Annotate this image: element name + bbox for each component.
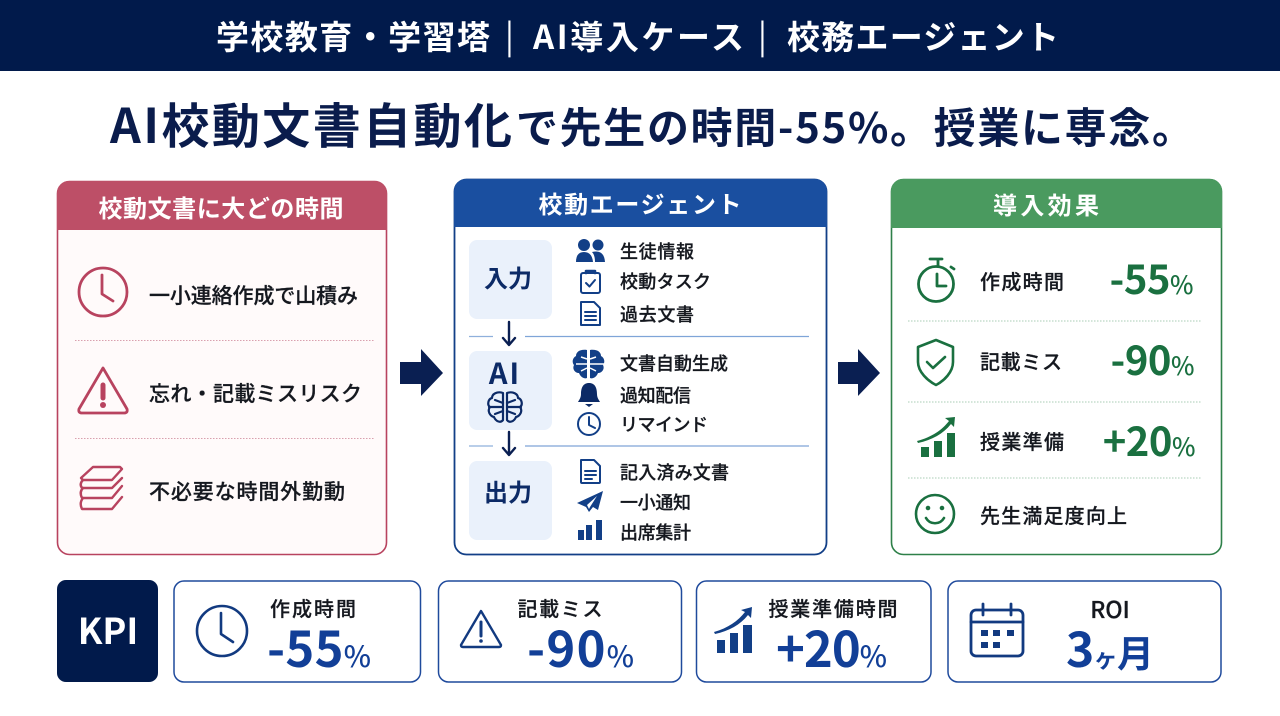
kpi card: errors bbox=[438, 581, 682, 682]
icon: people bbox=[576, 239, 605, 262]
panel: agent bbox=[454, 179, 827, 554]
icon: bell bbox=[578, 383, 600, 407]
panel: problems bbox=[57, 181, 387, 554]
output box: 出力 bbox=[484, 480, 532, 507]
output box bbox=[469, 461, 552, 540]
item: auto generation: 文書自動生成 bbox=[620, 354, 728, 374]
kpi card: time bbox=[174, 581, 420, 682]
item: past documents: 過去文書 bbox=[620, 305, 694, 325]
item: student info: 生徒情報 bbox=[620, 242, 694, 262]
arrow: ai to output bbox=[503, 432, 515, 455]
header text: AI導入ケース bbox=[532, 11, 744, 59]
result: lesson prep label: 授業準備 bbox=[980, 431, 1064, 454]
panel header: agent: 校動エージェント bbox=[538, 192, 742, 219]
ai box bbox=[469, 351, 552, 430]
icon: clipboard check bbox=[581, 271, 600, 293]
icon: paper stack bbox=[81, 467, 122, 509]
result: satisfaction: 先生満足度向上 bbox=[980, 505, 1127, 528]
kpi card: roi: ROI bbox=[1090, 591, 1130, 625]
item: completed document: 記入済み文書 bbox=[620, 463, 729, 483]
header text: 学校教育・学習塔 bbox=[216, 11, 490, 59]
result: time value: -55% bbox=[1110, 248, 1193, 306]
icon: kpi warning bbox=[461, 611, 501, 647]
title: AI校動文書自動化 bbox=[109, 87, 512, 157]
icon: kpi growth chart bbox=[714, 607, 752, 653]
title: で先生の時間-55%。授業に専念。 bbox=[516, 95, 1194, 156]
input box bbox=[469, 240, 552, 319]
panel header: results bbox=[891, 179, 1222, 228]
problem text 1: 一小連絡作成で山積み bbox=[149, 285, 358, 308]
item: attendance: 出席集計 bbox=[620, 523, 691, 543]
kpi card: errors: 記載ミス bbox=[518, 598, 602, 621]
arrow: agent to results bbox=[838, 349, 880, 396]
result: errors value: -90% bbox=[1111, 329, 1194, 387]
item: notice: 一小通知 bbox=[620, 493, 691, 513]
icon: brain outline bbox=[488, 392, 522, 422]
item: reminder: リマインド bbox=[620, 415, 708, 435]
icon: clock bbox=[79, 268, 127, 316]
icon: brain filled bbox=[573, 350, 604, 378]
panel header: agent bbox=[454, 179, 827, 227]
kpi card: errors: -90% bbox=[527, 611, 634, 682]
header text: | bbox=[758, 10, 767, 58]
header bar bbox=[0, 0, 1280, 71]
icon: filled document bbox=[581, 460, 600, 483]
panel header: results: 導入効果 bbox=[993, 193, 1099, 220]
icon: kpi clock bbox=[197, 606, 247, 656]
icon: bars bbox=[578, 520, 602, 540]
kpi card: lesson prep bbox=[696, 581, 931, 682]
header text: | bbox=[505, 10, 514, 58]
result: lesson prep value: +20% bbox=[1103, 410, 1195, 468]
item: school tasks: 校動タスク bbox=[620, 272, 711, 292]
kpi card: time: -55% bbox=[267, 611, 371, 682]
ai box: AI bbox=[488, 351, 521, 393]
title bbox=[109, 87, 1194, 157]
kpi card: time: 作成時間 bbox=[270, 598, 356, 621]
icon: shield bbox=[918, 340, 953, 385]
kpi card: roi: 3ヶ月 bbox=[1066, 611, 1154, 681]
panel header: problems: 校動文書に大どの時間 bbox=[98, 196, 344, 223]
kpi badge bbox=[57, 580, 158, 682]
icon: stopwatch bbox=[918, 259, 954, 302]
item: notification: 過知配信 bbox=[620, 386, 691, 406]
panel: results bbox=[891, 179, 1222, 554]
icon: paper plane bbox=[577, 491, 603, 512]
kpi card: lesson prep: +20% bbox=[776, 611, 887, 682]
header text bbox=[216, 10, 1059, 59]
result: errors label: 記載ミス bbox=[980, 351, 1062, 374]
problem text 3: 不必要な時間外勤動 bbox=[149, 481, 345, 504]
icon: calendar bbox=[971, 604, 1023, 656]
kpi card: roi bbox=[948, 581, 1221, 682]
kpi badge: KPI bbox=[78, 603, 138, 655]
arrow: problems to agent bbox=[400, 349, 443, 396]
icon: small clock bbox=[578, 413, 600, 435]
header text: 校務エージェント bbox=[787, 11, 1059, 59]
icon: smile bbox=[916, 495, 954, 533]
problem text 2: 忘れ・記載ミスリスク bbox=[149, 383, 362, 406]
arrow: input to ai bbox=[503, 322, 515, 345]
result: time label: 作成時間 bbox=[980, 271, 1064, 294]
icon: warning bbox=[79, 368, 127, 413]
icon: growth chart bbox=[917, 417, 955, 457]
icon: document bbox=[581, 302, 600, 325]
input box: 入力 bbox=[484, 266, 532, 293]
kpi card: lesson prep: 授業準備時間 bbox=[768, 598, 898, 621]
panel header: problems bbox=[57, 181, 387, 230]
